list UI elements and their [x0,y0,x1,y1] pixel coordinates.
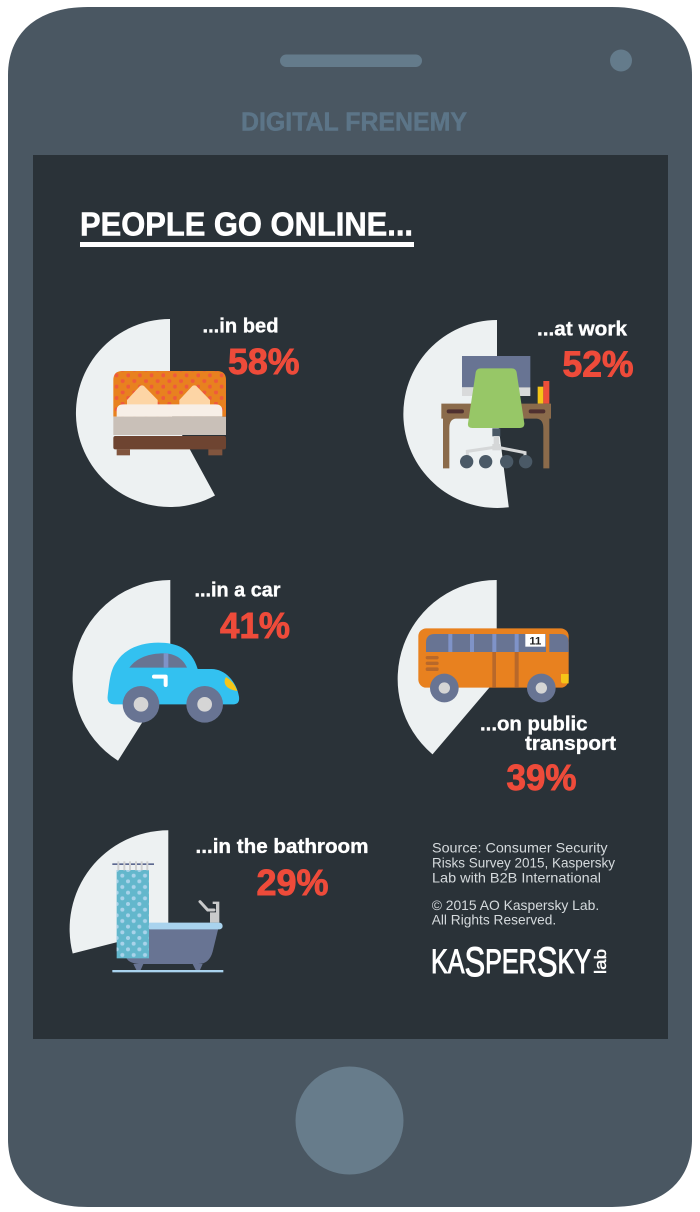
icon: bus: 11 [529,636,541,648]
label: in the bathroom: ...in the bathroom [196,836,368,858]
home button [296,1066,404,1174]
panel: in bed [76,316,300,507]
phone camera [610,50,632,72]
source and copyright text: Source: Consumer Security [432,839,608,855]
label: at work: ...at work [537,318,628,340]
icon: bathtub [112,861,223,972]
label: on public transport: transport [525,733,616,755]
panel: on public transport [398,580,616,798]
icon: car [108,643,239,723]
pie: 58 percent [76,319,215,507]
panel: in the bathroom [70,830,369,972]
label: in a car: ...in a car [194,580,281,602]
pie: 29 percent [70,830,168,954]
logo: Kaspersky Lab [431,938,610,985]
logo: Kaspersky Lab: S [537,938,558,985]
value: 39 percent: 39% [506,757,576,798]
logo: Kaspersky Lab: KA [431,943,476,981]
phone screen [33,155,668,1039]
source and copyright text: © 2015 AO Kaspersky Lab. [432,897,599,913]
value: 58 percent: 58% [228,341,300,382]
logo: Kaspersky Lab: lab [591,949,610,974]
value: 41 percent: 41% [220,605,290,646]
label: in bed: ...in bed [202,316,278,338]
source and copyright text: Risks Survey 2015, Kaspersky [432,855,615,871]
logo: Kaspersky Lab: PER [485,943,537,981]
title: PEOPLE GO ONLINE... [80,206,413,242]
phone brand heading: DIGITAL FRENEMY [241,106,467,136]
icon: desk and chair [441,356,551,468]
phone speaker [280,54,422,67]
source and copyright text: All Rights Reserved. [432,912,556,928]
value: 29 percent: 29% [256,862,328,903]
label: on public transport: ...on public [480,714,588,736]
icon: bed [113,371,226,455]
value: 52 percent: 52% [562,344,634,384]
pie: 39 percent [398,580,497,754]
pie: 41 percent [73,580,170,761]
panel: in a car [73,580,290,761]
panel: at work [403,318,634,508]
icon: bus [418,628,569,702]
label: on public transport [480,714,616,755]
source and copyright text: Lab with B2B International [432,870,601,886]
source and copyright text [432,839,615,928]
pie: 52 percent [403,320,509,508]
logo: Kaspersky Lab: KY [558,943,591,981]
logo: Kaspersky Lab: S [464,938,485,985]
